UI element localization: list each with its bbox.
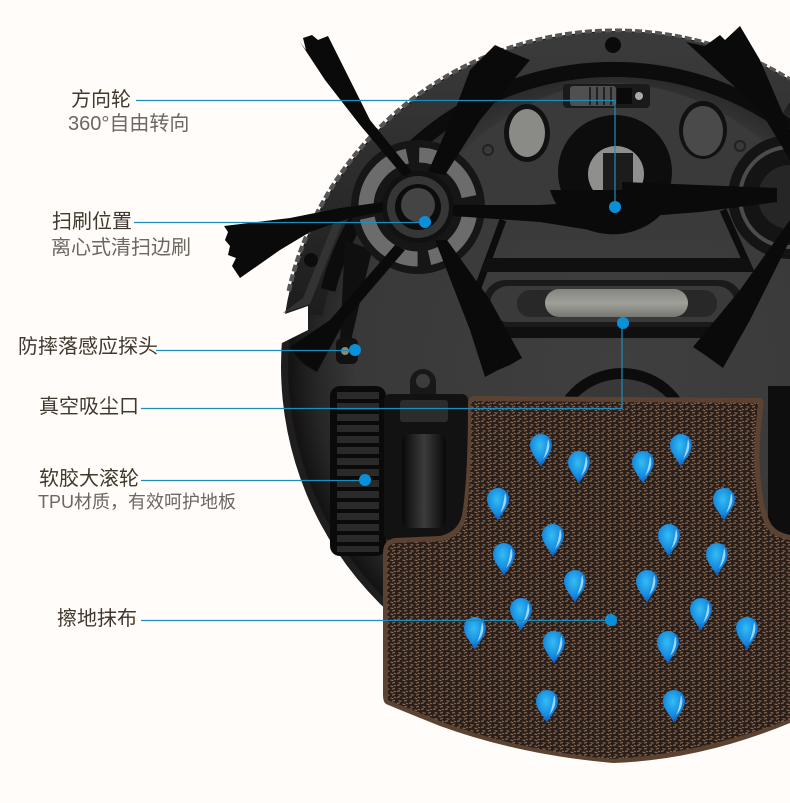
icon: central well — [550, 115, 672, 234]
callout: side brush — [51, 210, 431, 259]
callout: direction wheel: 360°自由转向 — [68, 112, 189, 135]
callout: rubber wheel: 软胶大滚轮 — [39, 467, 139, 490]
callout: side brush: 扫刷位置 — [52, 210, 132, 233]
right side brush hub — [728, 135, 790, 259]
callout: rubber wheel: TPU材质，有效呵护地板 — [38, 492, 236, 512]
caster bracket — [384, 369, 468, 540]
callout: direction wheel — [68, 88, 621, 213]
robot vacuum body — [224, 26, 790, 701]
callout: cliff sensor: 防摔落感应探头 — [18, 335, 158, 358]
suction slot — [483, 280, 743, 338]
icon: side ovals — [483, 101, 745, 162]
right dark block — [768, 386, 790, 541]
mop cloth — [383, 396, 790, 763]
callout: cliff sensor — [18, 335, 361, 358]
icon: direction wheel switch — [563, 84, 650, 108]
upper plate — [440, 83, 790, 290]
callout: vacuum inlet: 真空吸尘口 — [39, 395, 139, 418]
callout: mop cloth — [57, 607, 617, 630]
left brush bristles — [224, 35, 625, 377]
left side brush hub — [351, 140, 485, 274]
callout: vacuum inlet — [39, 317, 629, 418]
callout: direction wheel: 方向轮 — [71, 88, 131, 111]
cliff sensor — [336, 338, 358, 364]
callout: side brush: 离心式清扫边刷 — [51, 236, 191, 259]
callout: mop cloth: 擦地抹布 — [57, 607, 137, 630]
water drops — [464, 434, 758, 723]
lower center disc — [550, 368, 694, 512]
right brush bristles — [622, 26, 790, 368]
rubber roller wheel — [330, 386, 386, 556]
robot shell — [270, 31, 790, 701]
callout: rubber wheel — [38, 467, 371, 512]
